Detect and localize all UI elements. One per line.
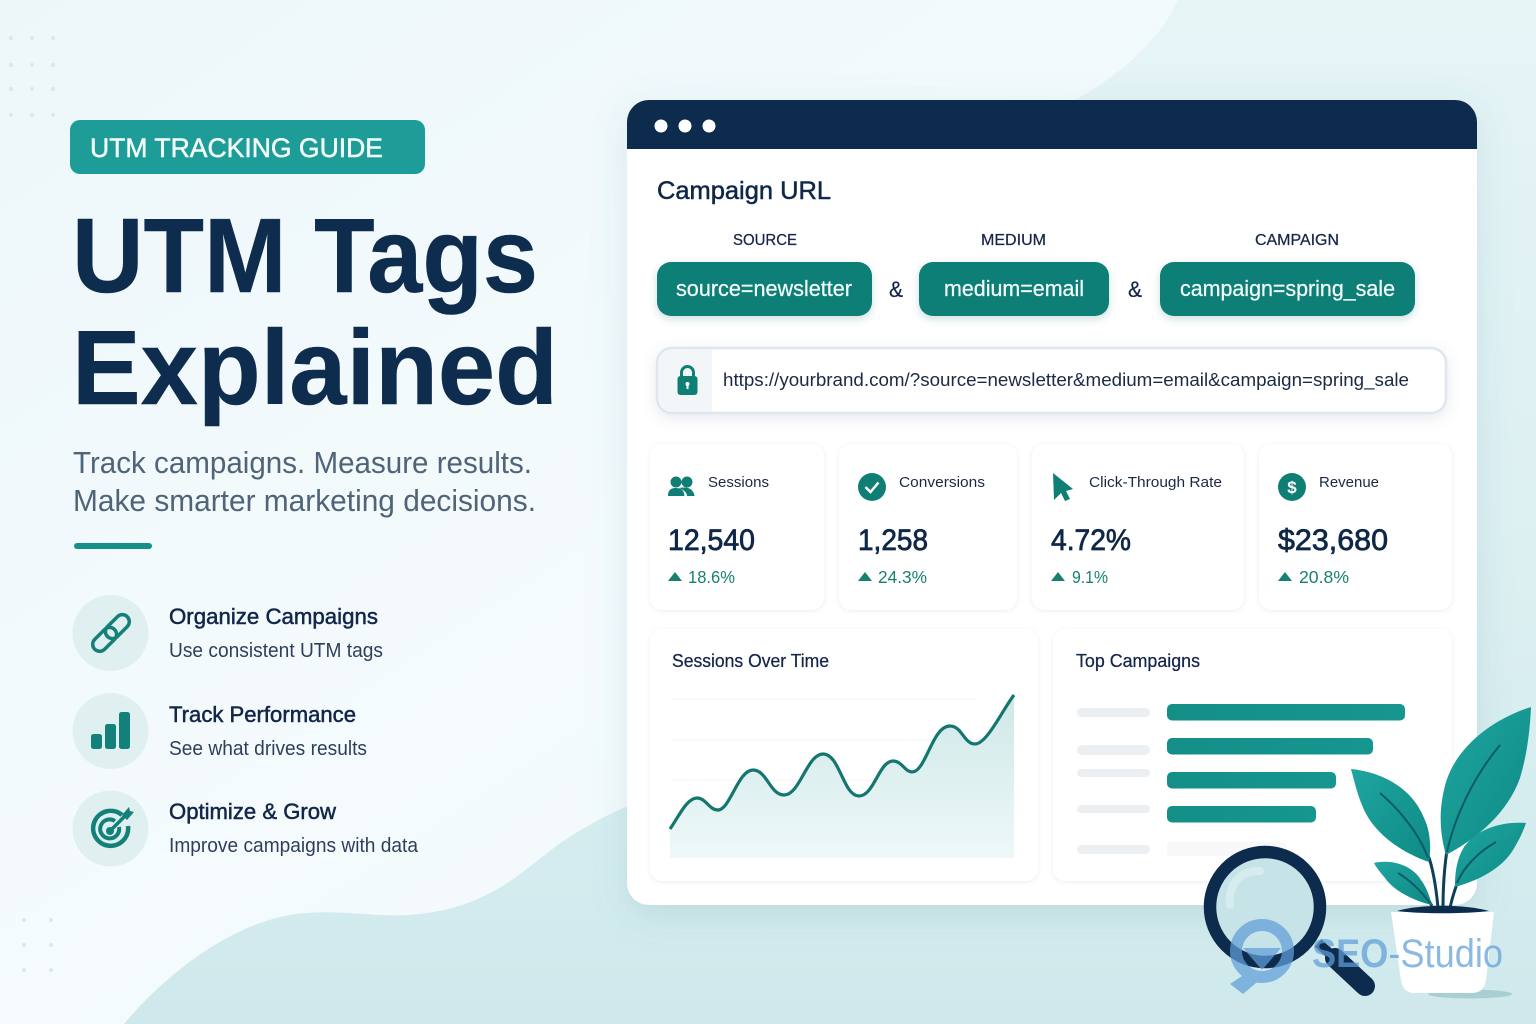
card: top campaigns chart: Top Campaigns — [1076, 651, 1200, 671]
text: optimize and grow: Improve campaigns with data — [169, 835, 419, 857]
delta: up 9.1%: 9.1% — [1072, 567, 1108, 587]
text: optimize and grow: Optimize & Grow — [169, 799, 336, 824]
subtitle: Make smarter marketing decisions. — [73, 483, 536, 518]
parameter pills: & — [1128, 277, 1142, 302]
badge: UTM tracking guide: UTM TRACKING GUIDE — [90, 133, 383, 163]
title: UTM Tags — [72, 197, 538, 315]
delta: up 18.6%: 18.6% — [688, 567, 735, 587]
text: track performance: See what drives results — [169, 738, 367, 760]
parameter labels: SOURCE — [733, 232, 797, 249]
watermark: SEO-Studio logo: SEO-Studio — [1312, 932, 1503, 976]
heading: campaign URL: Campaign URL — [657, 177, 831, 205]
parameter labels — [733, 232, 1339, 249]
card: revenue: $23,680 — [1278, 524, 1388, 557]
icon: cursor — [1053, 473, 1073, 501]
icon: dollar circle — [1278, 473, 1306, 501]
panel: browser dashboard — [627, 100, 1477, 905]
parameter labels: CAMPAIGN — [1255, 232, 1339, 249]
card: sessions: Sessions — [708, 474, 769, 491]
subtitle — [73, 445, 536, 518]
card: conversions: Conversions — [899, 474, 985, 491]
icon: bar chart — [72, 693, 148, 769]
placeholder labels — [1077, 708, 1150, 854]
icon: lock — [678, 366, 698, 395]
card: sessions — [650, 444, 824, 610]
text: track performance — [169, 702, 367, 760]
delta: up 18.6% — [668, 567, 735, 587]
card: top campaigns chart — [1053, 629, 1452, 881]
card: conversions: 1,258 — [858, 524, 928, 557]
feature: optimize and grow — [72, 790, 419, 866]
icon: chain link — [72, 595, 148, 671]
card: sessions over time chart: Sessions Over Time — [672, 651, 829, 671]
title: Explained — [72, 309, 558, 427]
card: click-through rate: Click-Through Rate — [1089, 474, 1222, 491]
card: revenue: Revenue — [1319, 474, 1379, 491]
parameter pills: & — [889, 277, 903, 302]
title — [72, 197, 558, 427]
icon: target — [72, 790, 148, 866]
delta: up 20.8%: 20.8% — [1299, 567, 1349, 587]
parameter pills — [657, 262, 1415, 316]
text: optimize and grow — [169, 799, 419, 857]
text: organize campaigns: Use consistent UTM tags — [169, 640, 383, 662]
card: sessions over time chart — [650, 629, 1038, 881]
card: conversions — [839, 444, 1017, 610]
card: sessions: 12,540 — [668, 524, 755, 557]
browser title bar — [627, 100, 1477, 149]
watermark: SEO-Studio logo — [1230, 925, 1503, 994]
parameter pills: medium=email — [944, 276, 1084, 301]
feature: organize campaigns — [72, 595, 383, 671]
text: track performance: Track Performance — [169, 702, 356, 727]
icon: people — [668, 476, 694, 496]
subtitle: Track campaigns. Measure results. — [73, 445, 532, 480]
icon: check circle — [858, 473, 886, 501]
area fill — [670, 695, 1014, 858]
parameter labels: MEDIUM — [981, 232, 1046, 249]
stems — [1426, 850, 1457, 908]
parameter pills: source=newsletter — [676, 276, 852, 301]
delta: up 20.8% — [1278, 567, 1349, 587]
text: organize campaigns: Organize Campaigns — [169, 604, 378, 629]
icon: dollar circle: $ — [1287, 478, 1297, 497]
pot — [1391, 912, 1494, 993]
leaves — [1351, 707, 1531, 905]
card: revenue — [1259, 444, 1452, 610]
card: click-through rate — [1032, 444, 1244, 610]
parameter pills: campaign=spring_sale — [1180, 276, 1395, 301]
icon: magnifying glass — [1210, 852, 1366, 986]
badge: UTM tracking guide — [70, 120, 425, 174]
URL bar: https://yourbrand.com/?source=newsletter&medium=email&campaign=spring_sale — [723, 369, 1409, 391]
text: organize campaigns — [169, 604, 383, 662]
URL bar — [657, 348, 1446, 413]
line: sessions trend — [670, 695, 1014, 829]
delta: up 24.3%: 24.3% — [878, 567, 927, 587]
feature: track performance — [72, 693, 367, 769]
leaf veins — [1380, 745, 1500, 903]
delta: up 9.1% — [1051, 567, 1108, 587]
icon: potted plant — [1351, 707, 1531, 998]
card: click-through rate: 4.72% — [1051, 524, 1131, 557]
bars — [1167, 704, 1405, 822]
